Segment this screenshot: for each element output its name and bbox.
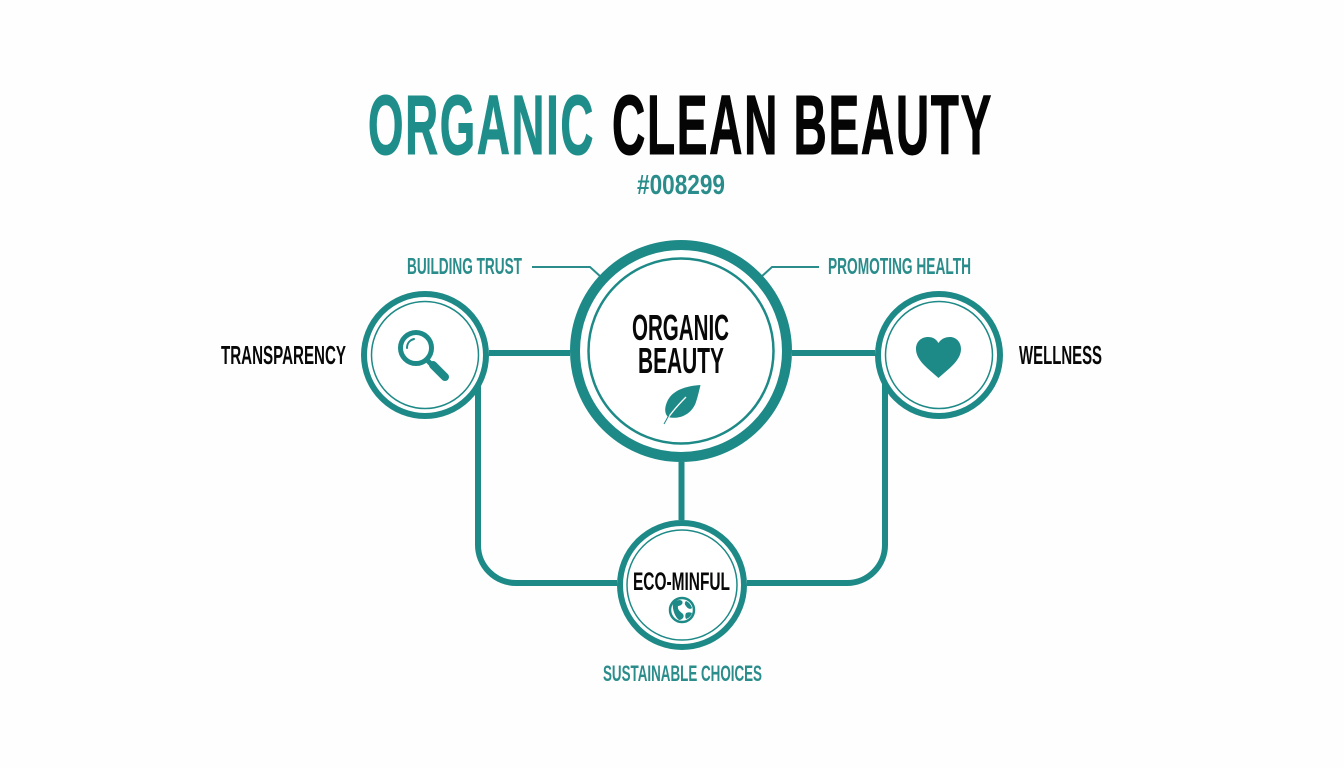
label: building trust: BUILDING TRUST xyxy=(407,253,522,279)
icon: leaf xyxy=(664,385,700,424)
node label: ECO-MINFUL xyxy=(633,568,730,596)
label: transparency: TRANSPARENCY xyxy=(221,340,346,370)
title: CLEAN BEAUTY xyxy=(612,78,993,172)
title: ORGANIC xyxy=(368,78,595,172)
label: promoting health: PROMOTING HEALTH xyxy=(828,253,971,279)
leader line: building trust xyxy=(532,267,601,277)
icon: globe xyxy=(670,598,694,622)
node: eco-minded xyxy=(620,523,744,647)
central label: ORGANIC xyxy=(632,307,729,348)
central label xyxy=(632,307,729,381)
label: wellness: WELLNESS xyxy=(1019,340,1102,370)
central label: BEAUTY xyxy=(638,340,724,381)
title xyxy=(368,78,993,172)
icon: magnifying glass xyxy=(400,332,445,377)
subtitle: colour code: #008299 xyxy=(637,169,725,200)
leader line: promoting health xyxy=(761,267,819,277)
icon: heart xyxy=(916,337,961,378)
connector network xyxy=(478,353,885,583)
central node: organic beauty xyxy=(575,245,787,457)
node: wellness xyxy=(878,294,1000,416)
label: sustainable choices: SUSTAINABLE CHOICES xyxy=(603,661,762,686)
node: transparency xyxy=(364,294,486,416)
